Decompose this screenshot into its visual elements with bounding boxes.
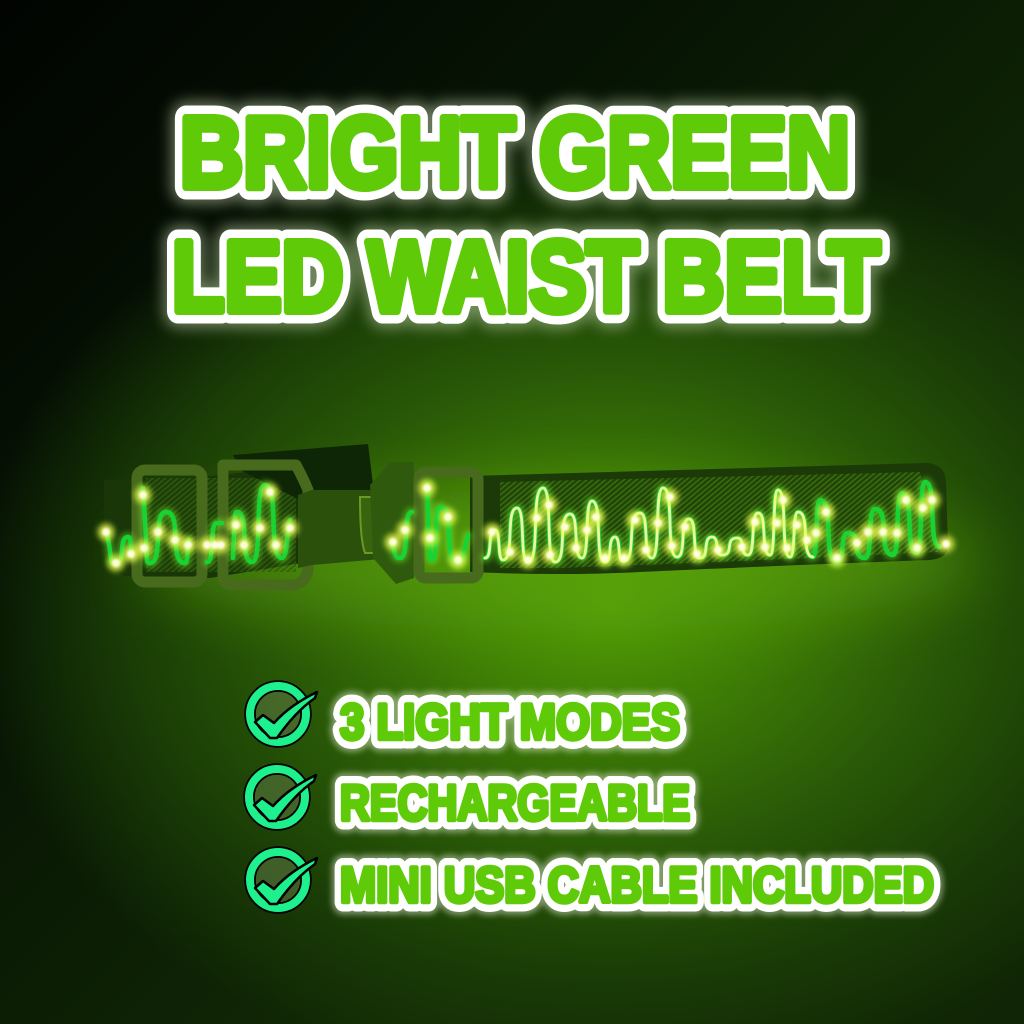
female buckle: [370, 462, 414, 584]
center buckle: [298, 490, 392, 568]
title line 1 glow: BRIGHT GREEN: [180, 97, 850, 209]
feature 2 text: RECHARGEABLE: [340, 775, 690, 831]
upper strap tail: [233, 444, 374, 500]
buckle frame 2: [223, 465, 308, 585]
feature 2 glow: RECHARGEABLE: [340, 775, 690, 831]
title line 2 outline: LED WAIST BELT: [172, 221, 880, 333]
led wire: [107, 482, 940, 563]
check icon 3: [250, 852, 317, 908]
feature 3 text: MINI USB CABLE INCLUDED: [340, 857, 934, 913]
feature 1 glow: 3 LIGHT MODES: [340, 694, 680, 750]
buckle frame 1: [137, 470, 202, 582]
title line 2 glow: LED WAIST BELT: [172, 221, 880, 333]
check icon 2: [249, 769, 316, 825]
led lights: [106, 488, 946, 563]
feature list: [249, 686, 934, 913]
led belt photo: [104, 444, 980, 630]
feature 3 glow: MINI USB CABLE INCLUDED: [340, 857, 934, 913]
feature 1: 3 light modes: [250, 686, 680, 750]
feature 2: rechargeable: [249, 769, 690, 831]
belt halo: [140, 490, 980, 630]
feature 2 outline: RECHARGEABLE: [340, 775, 690, 831]
check icon 1: [250, 686, 317, 742]
feature 3 outline: MINI USB CABLE INCLUDED: [340, 857, 934, 913]
title line 1: BRIGHT GREEN: [180, 97, 850, 209]
left strap: [104, 464, 320, 578]
right strap: [470, 463, 948, 574]
feature 3: mini usb cable included: [250, 852, 934, 913]
feature 1 outline: 3 LIGHT MODES: [340, 694, 680, 750]
buckle frame 3: [419, 472, 478, 578]
title: bright green led waist belt: [172, 97, 880, 333]
feature 1 text: 3 LIGHT MODES: [340, 694, 680, 750]
title line 1 outline: BRIGHT GREEN: [180, 97, 850, 209]
title line 2: LED WAIST BELT: [172, 221, 880, 333]
